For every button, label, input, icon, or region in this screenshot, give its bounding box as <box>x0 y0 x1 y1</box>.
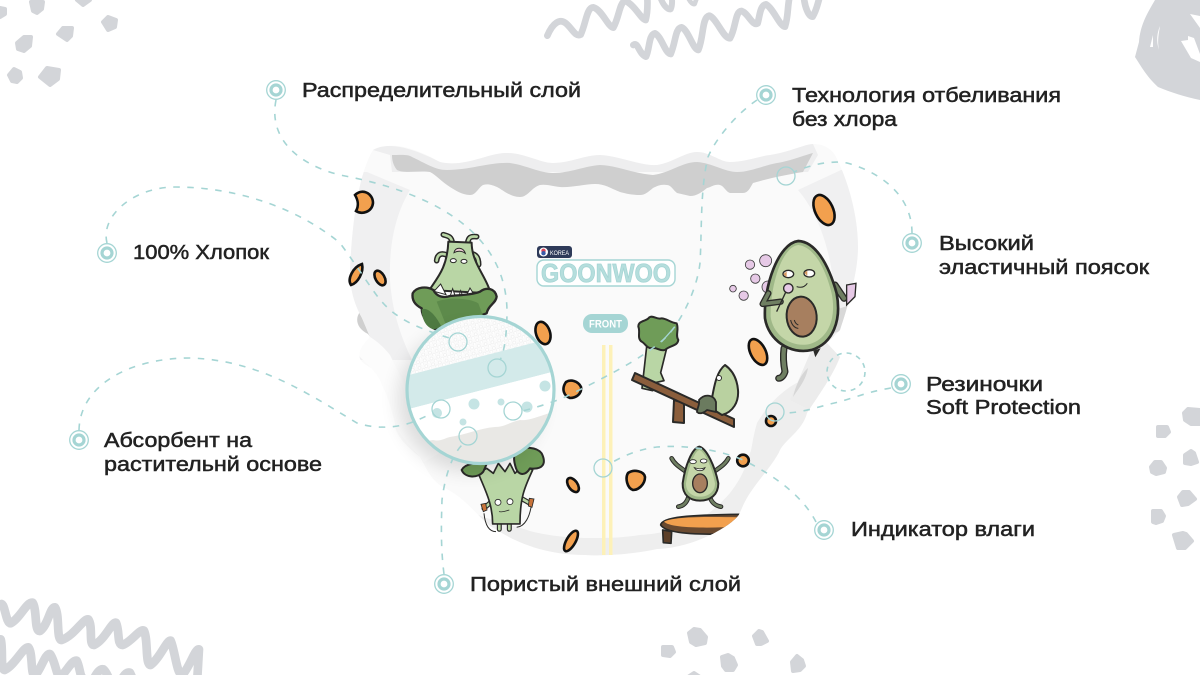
dashed circle: soft protection area <box>827 353 865 391</box>
character: broccoli jumping rope <box>462 448 544 532</box>
logo: GOONWOO: GOONWOO <box>541 258 671 288</box>
seesaw <box>632 373 734 427</box>
diaper: leg cuff shadow left <box>357 312 415 402</box>
logo: KOREA badge <box>537 246 572 258</box>
magnifier <box>398 310 560 472</box>
logo: KOREA badge: KOREA <box>550 250 569 257</box>
absorbent bubbles <box>432 380 550 426</box>
character: avocado jumping <box>672 447 728 507</box>
decoration: top-left dots <box>0 0 116 85</box>
character: broccoli top left <box>412 235 497 330</box>
label: Высокий эластичный поясок <box>903 233 1149 279</box>
yellow moisture indicator lines <box>602 345 612 555</box>
leader lines <box>79 100 912 574</box>
decoration: top-right scribble <box>1135 0 1200 100</box>
diaper illustration <box>345 144 870 560</box>
label: Индикатор влаги: Индикатор влаги <box>851 519 1035 541</box>
diaper: light waistband <box>373 144 818 172</box>
character: avocado on seesaw <box>697 365 738 415</box>
decoration: bottom-left squiggles <box>1 603 199 675</box>
label: Резиночки Soft Protection <box>892 374 1081 419</box>
character: broccoli on seesaw <box>638 317 678 391</box>
seeds: orange spots <box>350 192 839 553</box>
layer: grey outer <box>430 414 548 462</box>
label: Технология отбеливания без хлора <box>757 85 1061 131</box>
magnifier shadow <box>398 328 542 472</box>
layer: white absorbent <box>412 372 550 408</box>
label: Высокий эластичный поясок: Высокий <box>939 233 1034 255</box>
label: 100% Хлопок: 100% Хлопок <box>133 242 269 264</box>
diaper: body <box>350 144 858 555</box>
label: Резиночки Soft Protection: Soft Protection <box>926 397 1081 419</box>
label: Технология отбеливания без хлора: без хлора <box>792 109 898 131</box>
label: Абсорбент на растительнй основе: растительнй основе <box>104 454 322 476</box>
decoration: top squiggles <box>547 0 819 57</box>
diaper: inner waist grey scallops <box>392 153 813 197</box>
label: Абсорбент на растительнй основе <box>70 430 322 476</box>
trampoline <box>661 514 740 543</box>
label: Резиночки Soft Protection: Резиночки <box>926 374 1043 396</box>
callout circles on diaper <box>432 167 795 477</box>
magnifier ring <box>407 316 554 464</box>
diaper: side and bottom shading <box>345 170 870 560</box>
label: Технология отбеливания без хлора: Технология отбеливания <box>792 85 1061 107</box>
decoration: bottom dots <box>663 629 804 675</box>
FRONT pill: FRONT <box>589 318 622 330</box>
layer: perforated top <box>411 318 534 374</box>
layer: teal band <box>408 342 550 408</box>
label: Распределительный слой: Распределительный слой <box>302 80 581 102</box>
decoration: right dots <box>1151 409 1200 548</box>
diaper: white leg frill left <box>359 337 445 462</box>
bubbles <box>730 255 774 300</box>
FRONT pill <box>583 314 628 333</box>
label: Пористый внешний слой: Пористый внешний слой <box>470 574 741 596</box>
label: Абсорбент на растительнй основе: Абсорбент на <box>104 430 253 452</box>
label: Высокий эластичный поясок: эластичный поясок <box>939 257 1149 279</box>
character: big avocado with bubbles <box>730 241 856 378</box>
